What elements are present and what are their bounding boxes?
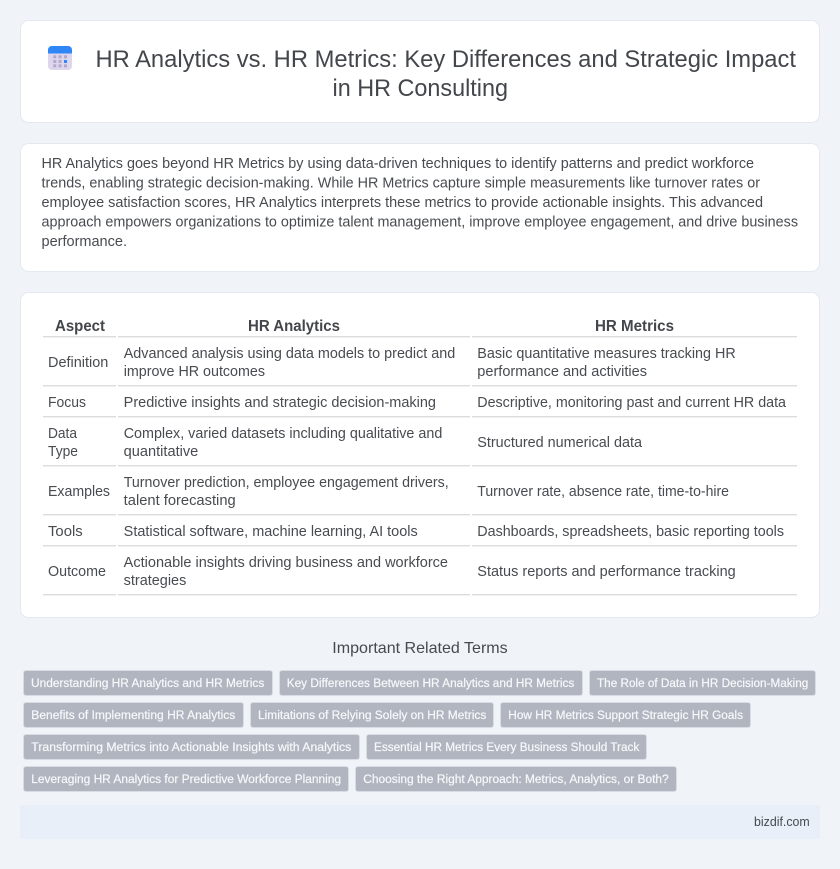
tag: Limitations of Relying Solely on HR Metrics [258,708,486,722]
table row: data type: Type [48,444,78,460]
text block: introduction paragraph [42,156,798,250]
text block: introduction paragraph: performance. [42,234,127,250]
table row: data type: Complex, varied datasets including qualitative and [124,426,442,442]
panel: related term tags [24,670,816,792]
table row: outcome: Status reports and performance tracking [477,564,736,580]
table row: tools [48,524,784,540]
footer: bizdif.com [754,814,810,829]
text block: introduction paragraph: approach empowers organizations to optimize talent management, improve employee engagement, and drive business [42,214,798,230]
table row: focus: Predictive insights and strategic decision-making [124,395,436,411]
table row: examples: Turnover rate, absence rate, time-to-hire [477,484,729,500]
title [96,46,796,102]
footer [20,805,820,839]
tag: Essential HR Metrics Every Business Should Track [374,740,640,754]
table header row: HR Metrics [595,318,674,335]
tag [24,766,348,792]
table row: outcome: strategies [124,573,186,589]
table row: data type: Structured numerical data [477,435,642,451]
table row: data type [48,426,642,460]
panel: title header [20,20,820,122]
table row: outcome: Actionable insights driving business and workforce [124,555,448,571]
text block: introduction paragraph: employee satisfaction scores, HR Analytics interprets these metrics to provide actionable insights. This advanced [42,195,763,211]
table row: focus: Focus [48,395,86,411]
tag [280,670,582,696]
panel: comparison table [20,292,820,618]
heading: important related terms: Important Related Terms [332,640,508,657]
tag [500,702,750,728]
table row: definition: performance and activities [477,364,647,380]
table row: examples [48,475,729,509]
title: HR Analytics vs. HR Metrics: Key Differences and Strategic Impact [96,46,796,73]
table row: focus [48,395,786,411]
icon: calendar [48,46,72,70]
tag [24,670,272,696]
tag: Choosing the Right Approach: Metrics, Analytics, or Both? [363,772,669,786]
tag [366,734,646,760]
table row: tools: Statistical software, machine learning, AI tools [124,524,418,540]
table row: definition: Basic quantitative measures tracking HR [477,346,736,362]
table row: definition: improve HR outcomes [124,364,265,380]
table row: examples: Examples [48,484,110,500]
table row: outcome: Outcome [48,564,106,580]
tag: Leveraging HR Analytics for Predictive Workforce Planning [31,772,341,786]
table row: definition: Definition [48,355,108,371]
table row: tools: Tools [48,524,83,540]
tag [24,702,244,728]
tag [590,670,816,696]
table row: examples: Turnover prediction, employee engagement drivers, [124,475,449,491]
tag [24,734,360,760]
tag: Transforming Metrics into Actionable Insights with Analytics [31,740,351,754]
table row: tools: Dashboards, spreadsheets, basic reporting tools [477,524,784,540]
table row: examples: talent forecasting [124,493,236,509]
text block: introduction paragraph: trends, enabling strategic decision-making. While HR Metrics capture simple measurements like turnover rates or [42,176,760,192]
table row: data type: Data [48,426,77,442]
tag: How HR Metrics Support Strategic HR Goals [508,708,743,722]
table header row: HR Analytics [248,318,340,335]
table row: definition [48,346,736,380]
table header row: Aspect [55,318,106,335]
tag [356,766,676,792]
text block: introduction paragraph: HR Analytics goes beyond HR Metrics by using data-driven techniques to identify patterns and predict workforce [42,156,754,172]
table row: definition: Advanced analysis using data models to predict and [124,346,455,362]
table row: outcome [48,555,736,589]
tag: The Role of Data in HR Decision-Making [597,676,808,690]
table header row [55,318,674,335]
tag: Benefits of Implementing HR Analytics [31,708,235,722]
tag: Key Differences Between HR Analytics and HR Metrics [287,676,574,690]
tag [250,702,494,728]
table row: focus: Descriptive, monitoring past and current HR data [477,395,786,411]
title: in HR Consulting [332,75,508,102]
table row: data type: quantitative [124,444,198,460]
tag: Understanding HR Analytics and HR Metrics [31,676,264,690]
panel: introduction [20,144,820,272]
